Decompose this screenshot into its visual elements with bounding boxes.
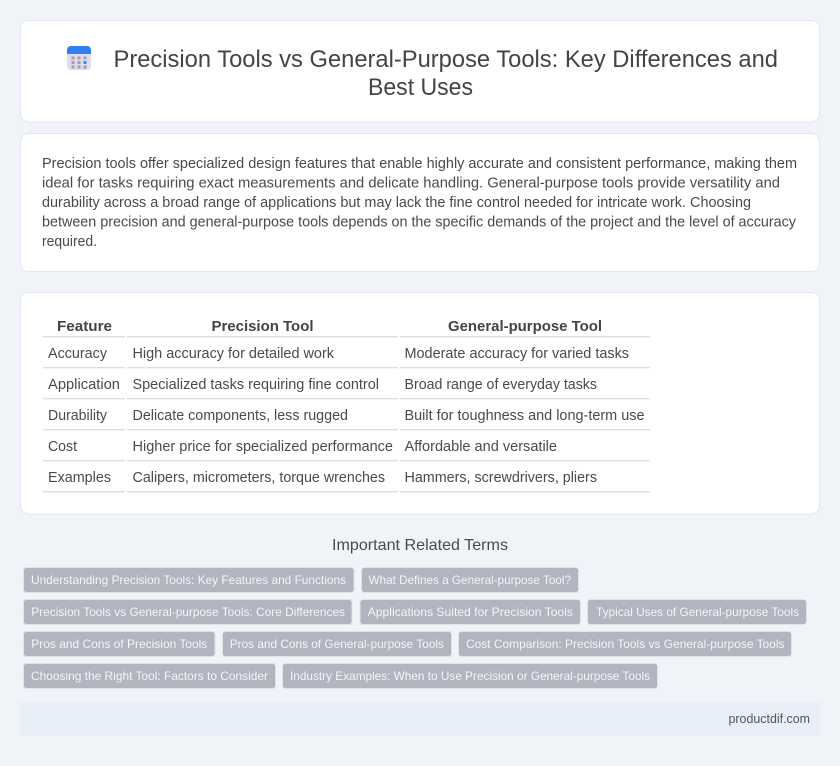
table row: accuracy xyxy=(43,346,650,368)
tag: Cost Comparison: Precision Tools vs General-purpose Tools xyxy=(466,637,784,651)
table row: cost: Affordable and versatile xyxy=(404,439,557,455)
tag: Precision Tools vs General-purpose Tools: Core Differences xyxy=(31,605,345,619)
table row: durability: Built for toughness and long-term use xyxy=(404,408,644,424)
text block: introduction paragraph: Precision tools offer specialized design features that enable highly accurate and consistent performance, making them xyxy=(42,156,797,172)
table row: examples: Examples xyxy=(48,470,111,486)
tag: Pros and Cons of General-purpose Tools xyxy=(230,637,444,651)
table row: durability: Durability xyxy=(48,408,108,424)
panel: header xyxy=(20,20,820,122)
text block: introduction paragraph: required. xyxy=(42,234,97,250)
tag: Understanding Precision Tools: Key Features and Functions xyxy=(31,573,346,587)
table row: accuracy: Moderate accuracy for varied tasks xyxy=(404,346,629,362)
tag xyxy=(588,600,806,624)
table header row xyxy=(43,319,650,337)
tag: Typical Uses of General-purpose Tools xyxy=(596,605,799,619)
title: Best Uses xyxy=(368,74,473,101)
table row: examples xyxy=(43,470,650,492)
tag xyxy=(24,664,276,688)
tag xyxy=(24,568,354,592)
table header row: Precision Tool xyxy=(212,319,314,335)
text block: introduction paragraph xyxy=(42,156,797,250)
tag: Industry Examples: When to Use Precision or General-purpose Tools xyxy=(290,669,650,683)
icon: calendar xyxy=(67,46,91,70)
panel: comparison table xyxy=(20,292,820,514)
tag xyxy=(24,600,352,624)
tag xyxy=(24,632,215,656)
title: Precision Tools vs General-Purpose Tools: Key Differences and xyxy=(114,46,778,73)
table header row: General-purpose Tool xyxy=(448,319,602,335)
tag xyxy=(360,600,580,624)
panel: introduction xyxy=(20,134,820,272)
heading: important related terms: Important Related Terms xyxy=(332,537,508,554)
text block: introduction paragraph: durability across a broad range of applications but may lack the fine control needed for intricate work. Choosing xyxy=(42,195,751,211)
table row: durability: Delicate components, less rugged xyxy=(132,408,348,424)
tag xyxy=(458,632,792,656)
tag: Pros and Cons of Precision Tools xyxy=(31,637,207,651)
tag xyxy=(282,664,658,688)
table row: cost: Cost xyxy=(48,439,77,455)
related term tags xyxy=(24,568,806,688)
tag: What Defines a General-purpose Tool? xyxy=(368,573,571,587)
table row: examples: Calipers, micrometers, torque wrenches xyxy=(132,470,385,486)
title xyxy=(114,46,778,101)
tag: Applications Suited for Precision Tools xyxy=(368,605,573,619)
text block: introduction paragraph: between precision and general-purpose tools depends on the specific demands of the project and the level of accuracy xyxy=(42,214,797,230)
footer: productdif.com xyxy=(728,712,810,726)
text block: introduction paragraph: ideal for tasks requiring exact measurements and delicate handling. General-purpose tools provide versatility and xyxy=(42,176,780,192)
footer xyxy=(20,702,820,736)
table row: cost xyxy=(43,439,650,461)
table row: application: Broad range of everyday tasks xyxy=(404,377,597,393)
table row: application: Specialized tasks requiring fine control xyxy=(132,377,379,393)
tag: Choosing the Right Tool: Factors to Consider xyxy=(31,669,268,683)
tag xyxy=(362,568,578,592)
table row: accuracy: High accuracy for detailed work xyxy=(132,346,335,362)
table row: application xyxy=(43,377,650,399)
table row: application: Application xyxy=(48,377,120,393)
table row: accuracy: Accuracy xyxy=(48,346,108,362)
table header row: Feature xyxy=(57,319,112,335)
table row: cost: Higher price for specialized performance xyxy=(132,439,393,455)
table row: durability xyxy=(43,408,650,430)
table row: examples: Hammers, screwdrivers, pliers xyxy=(404,470,597,486)
tag xyxy=(222,632,452,656)
